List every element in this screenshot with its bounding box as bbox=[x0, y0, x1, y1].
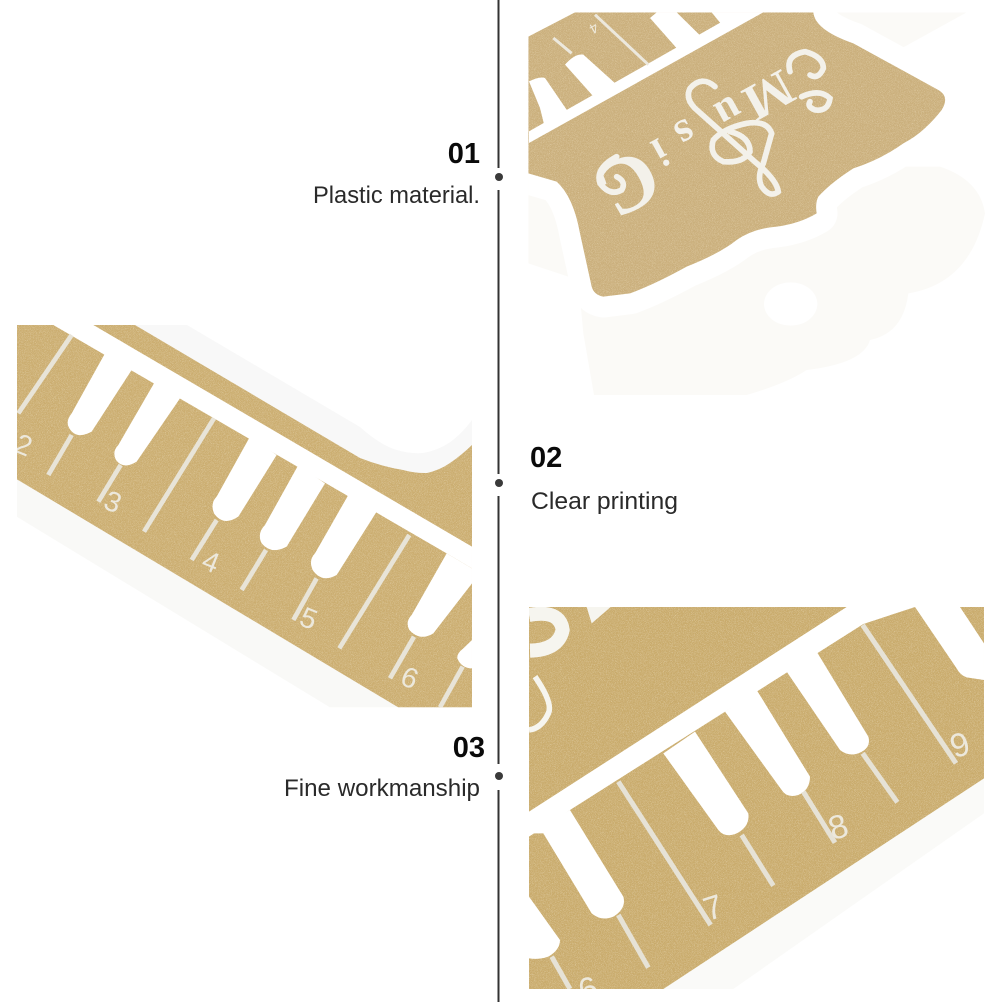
clef remnant bbox=[529, 607, 611, 730]
key divider lines bbox=[552, 625, 956, 989]
gold print area bbox=[528, 12, 945, 297]
timeline dot 02 bbox=[495, 479, 503, 487]
gold print area bbox=[17, 325, 472, 707]
key number 4: 4 bbox=[587, 19, 602, 37]
feature 02 text: 02 bbox=[530, 442, 562, 474]
key numbers: 5 bbox=[295, 601, 322, 637]
feature 03 text: Fine workmanship bbox=[284, 775, 480, 802]
key divider lines bbox=[18, 335, 463, 707]
translucent plastic backing bbox=[528, 12, 985, 395]
timeline dot 01 bbox=[495, 173, 503, 181]
key numbers bbox=[10, 428, 423, 696]
feature 01 text: Plastic material. bbox=[313, 182, 480, 209]
hanging hole bbox=[764, 282, 817, 326]
logo flourishes and treble clef bbox=[599, 52, 830, 194]
piano keys bbox=[529, 607, 984, 959]
logo letters bbox=[582, 58, 803, 236]
piano keys bbox=[68, 353, 472, 668]
timeline: vertical line bbox=[498, 0, 500, 1002]
timeline dot 03 bbox=[495, 772, 503, 780]
upper white plastic edge bbox=[53, 325, 472, 560]
key numbers: 6 bbox=[396, 661, 423, 696]
feature 03 text bbox=[284, 732, 485, 802]
key numbers bbox=[580, 733, 968, 989]
lower white plastic edge bbox=[660, 778, 984, 989]
logo letters: C bbox=[582, 131, 675, 236]
feature 02 text: Clear printing bbox=[531, 488, 678, 515]
lower white plastic edge bbox=[17, 477, 407, 707]
logo letters: i bbox=[644, 129, 676, 174]
key numbers: 3 bbox=[99, 485, 126, 520]
key numbers: 8 bbox=[824, 807, 853, 848]
feature 01 text: 01 bbox=[448, 138, 480, 170]
piano keyboard strip bbox=[529, 12, 763, 143]
logo letters: M bbox=[733, 58, 803, 132]
key numbers: 2 bbox=[10, 428, 37, 463]
logo letters: u bbox=[707, 86, 751, 139]
white plastic body bbox=[528, 12, 945, 297]
key numbers: 7 bbox=[699, 888, 728, 929]
feature 03 text: 03 bbox=[453, 732, 485, 764]
logo letters: s bbox=[667, 109, 705, 159]
white keyboard strip bbox=[53, 325, 472, 568]
photo: ruler keys 2 to 6 bbox=[10, 325, 472, 707]
feature 01 text bbox=[313, 138, 480, 209]
white keyboard strip bbox=[529, 607, 915, 837]
photo: ruler head with Music logo bbox=[528, 12, 946, 297]
gold print area bbox=[529, 607, 984, 989]
feature 02 text bbox=[530, 442, 678, 515]
key numbers: 9 bbox=[946, 725, 975, 766]
key numbers: 4 bbox=[197, 545, 224, 580]
photo: ruler keys 6 to 9 bbox=[529, 607, 984, 1002]
Music logo bbox=[596, 48, 833, 216]
